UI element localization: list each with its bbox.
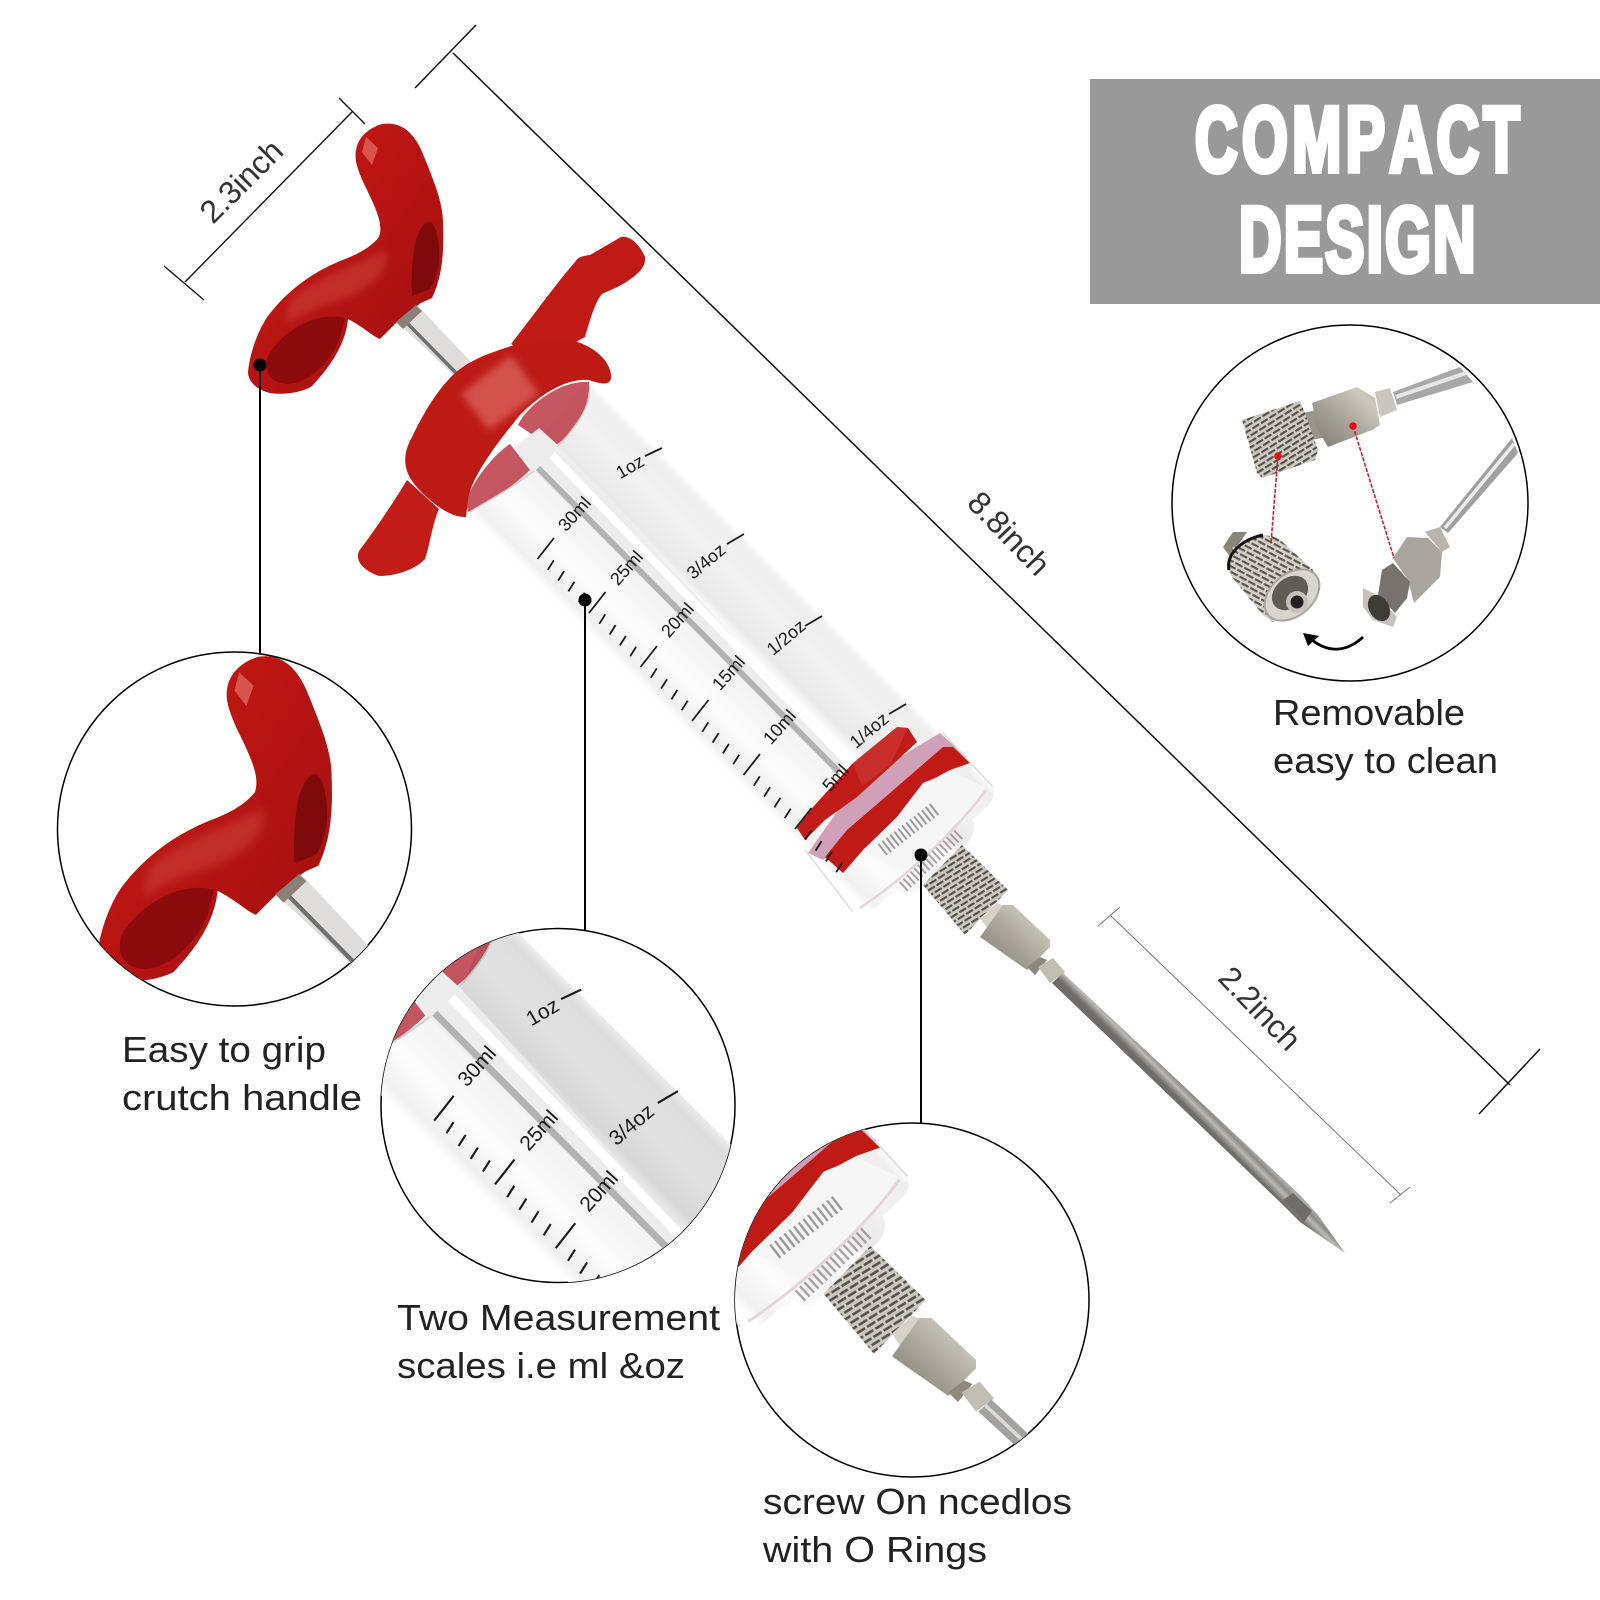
dimension: 8.8 inch: 8.8inch bbox=[961, 484, 1057, 583]
needle bbox=[1052, 973, 1345, 1253]
barrel scale labels: 20ml bbox=[657, 599, 698, 641]
caption: screw-on needles bbox=[762, 1481, 1072, 1570]
assembled connector bbox=[1242, 367, 1473, 478]
detail circle: measurement scales: 1oz bbox=[522, 994, 563, 1031]
caption: measurement scales bbox=[397, 1297, 720, 1386]
detail circle: measurement scales bbox=[380, 928, 736, 1284]
barrel bbox=[466, 380, 994, 914]
needle hub bbox=[923, 845, 1065, 983]
caption: measurement scales: scales i.e ml &oz bbox=[397, 1345, 685, 1386]
caption: screw-on needles: with O Rings bbox=[762, 1529, 987, 1570]
banner: compact design: DESIGN bbox=[1239, 189, 1478, 291]
caption: crutch handle: crutch handle bbox=[122, 1077, 362, 1118]
barrel scale labels: 3/4oz bbox=[683, 540, 729, 583]
banner: compact design: COMPACT bbox=[1195, 89, 1524, 191]
finger flange bbox=[358, 237, 645, 576]
detail circle: removable parts bbox=[1172, 325, 1528, 681]
detail circle: measurement scales: 30ml bbox=[453, 1042, 501, 1091]
detail circle: measurement scales: 20ml bbox=[575, 1167, 623, 1216]
dimension: 2.2 inch: 2.2inch bbox=[1212, 959, 1308, 1058]
caption: removable: Removable bbox=[1273, 692, 1465, 733]
dimension: 2.3 inch: 2.3inch bbox=[192, 132, 290, 230]
dimension: 2.3 inch bbox=[164, 98, 365, 300]
caption: crutch handle: Easy to grip bbox=[122, 1029, 326, 1070]
caption: removable bbox=[1273, 692, 1498, 781]
barrel scale labels bbox=[554, 451, 892, 795]
barrel scale labels: 1/4oz bbox=[846, 709, 892, 752]
barrel scale labels: 10ml bbox=[759, 706, 800, 748]
detail circle: screw-on needles bbox=[734, 1122, 1090, 1478]
caption: screw-on needles: screw On ncedlos bbox=[763, 1481, 1072, 1522]
barrel scale labels: 5ml bbox=[818, 761, 853, 795]
barrel scale labels: 1oz bbox=[612, 451, 648, 483]
red link lines bbox=[1271, 422, 1394, 558]
barrel scale labels: 30ml bbox=[554, 493, 595, 535]
detail circle: measurement scales: 3/4oz bbox=[605, 1100, 659, 1150]
rotation arrow bbox=[1303, 633, 1363, 649]
caption: removable: easy to clean bbox=[1273, 740, 1498, 781]
callout lines and dots bbox=[254, 358, 928, 1123]
detached knurled nut bbox=[1223, 532, 1320, 622]
needle opening bbox=[1283, 1193, 1312, 1222]
detail circle: measurement scales: 25ml bbox=[515, 1106, 563, 1155]
caption: measurement scales: Two Measurement bbox=[397, 1297, 720, 1338]
detached needle bbox=[1363, 438, 1518, 627]
detail circle: crutch handle bbox=[58, 652, 412, 1006]
caption: crutch handle bbox=[122, 1029, 362, 1118]
barrel scale labels: 1/2oz bbox=[763, 616, 809, 659]
dimension: 2.2 inch bbox=[1098, 907, 1410, 1203]
barrel scale labels: 15ml bbox=[708, 652, 749, 694]
banner: compact design bbox=[1090, 79, 1600, 304]
plunger handle bbox=[248, 124, 475, 394]
main syringe bbox=[248, 124, 1345, 1253]
barrel scale labels: 25ml bbox=[606, 547, 647, 589]
